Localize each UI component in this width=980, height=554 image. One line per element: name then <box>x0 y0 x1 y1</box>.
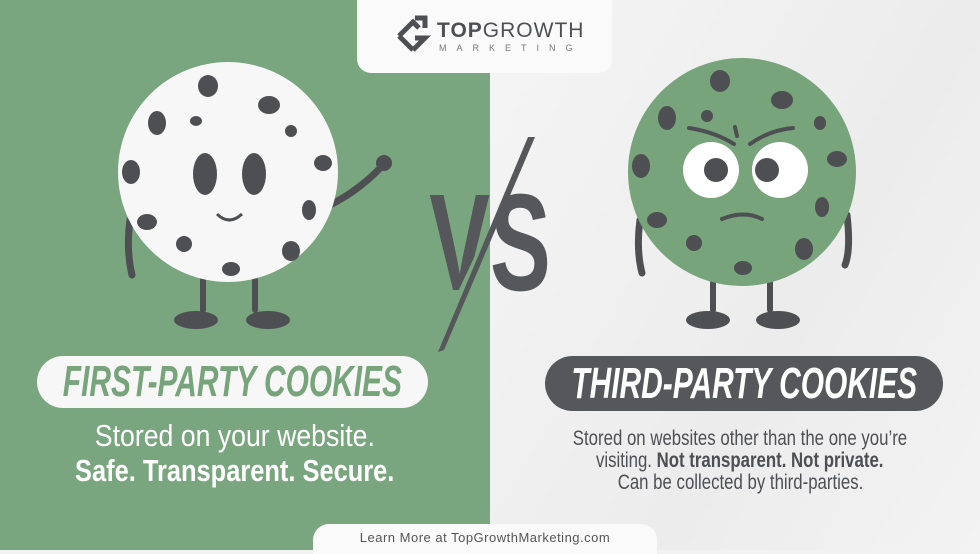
illustration: angry green cookie <box>628 58 856 329</box>
footer: learn more pill: Learn More at TopGrowthMarketing.com <box>360 530 610 545</box>
logo box: MARKETING <box>439 43 583 53</box>
text: first-party description: Stored on your website. <box>95 418 375 453</box>
label: first-party cookies pill: FIRST-PARTY COOKIES <box>63 357 402 406</box>
logo text: TOPGROWTH <box>437 19 584 42</box>
illustration: happy white cookie <box>118 62 392 329</box>
text: third-party description: visiting. Not transparent. Not private. <box>596 449 884 472</box>
logo box <box>357 0 612 73</box>
panel: right light background <box>490 0 980 550</box>
text: first-party description <box>75 418 395 488</box>
text: third-party description: Can be collected by third-parties. <box>617 471 863 494</box>
label: third-party cookies pill: THIRD-PARTY COOKIES <box>571 359 917 408</box>
text: third-party description: Stored on websites other than the one you’re <box>573 427 907 450</box>
panel: left green background <box>0 0 490 550</box>
footer: learn more pill <box>313 524 657 554</box>
icon: logo mark <box>397 16 431 52</box>
text: third-party description <box>573 427 907 494</box>
VS graphic: VS <box>429 165 551 320</box>
text: first-party description: Safe. Transparent. Secure. <box>75 453 395 488</box>
